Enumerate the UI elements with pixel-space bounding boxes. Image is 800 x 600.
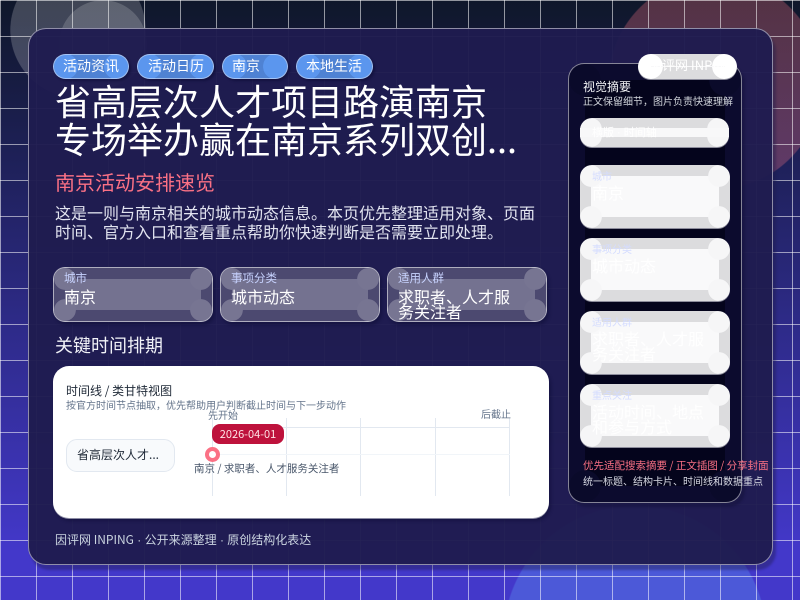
info card: 城市: 南京 xyxy=(64,284,96,308)
sidebar card: 适用人群: 适用人群 xyxy=(592,314,632,329)
brand pill: 因评网 INPING xyxy=(649,55,735,74)
sidebar card: 事项分类 xyxy=(580,238,730,301)
tag: 本地生活 xyxy=(296,54,373,79)
tag: 活动资讯 xyxy=(53,54,129,79)
gantt grid xyxy=(212,418,510,496)
tag: 活动日历 xyxy=(137,54,214,79)
tag: 活动日历: 活动日历 xyxy=(148,56,204,76)
tag: 本地生活: 本地生活 xyxy=(306,56,362,76)
row label pill xyxy=(66,439,175,472)
sidebar card: 适用人群 xyxy=(580,311,730,374)
brand pill xyxy=(638,54,737,79)
sidebar card: 事项分类: 城市动态 xyxy=(592,253,656,277)
start label: 先开始 xyxy=(208,407,238,422)
sidebar description: 正文保留细节，图片负责快速理解 xyxy=(583,93,733,108)
tag: 活动资讯: 活动资讯 xyxy=(63,56,119,76)
end label: 后截止 xyxy=(481,406,511,421)
sidebar card: 事项分类: 事项分类 xyxy=(592,241,632,256)
timeline description: 按官方时间节点抽取，优先帮助用户判断截止时间与下一步动作 xyxy=(66,397,346,412)
footer: 因评网 INPING · 公开来源整理 · 原创结构化表达 xyxy=(55,531,311,548)
tag: 南京 xyxy=(222,54,288,79)
date badge: 2026-04-01 xyxy=(220,426,276,442)
sidebar card: 重点关注: 重点关注 xyxy=(592,387,632,402)
info card: 城市: 城市 xyxy=(64,270,87,286)
timeline panel xyxy=(53,366,549,518)
tag: 南京: 南京 xyxy=(232,56,260,76)
sidebar card: 重点关注 xyxy=(580,384,730,447)
row label pill: 省高层次人才... xyxy=(77,446,159,463)
description text: 时间、官方入口和查看重点帮助你快速判断是否需要立即处理。 xyxy=(55,219,503,243)
info card: 城市 xyxy=(53,267,213,322)
info card: 适用人群: 适用人群 xyxy=(398,270,444,286)
sidebar card: 城市: 南京 xyxy=(592,180,624,204)
sidebar note: 统一标题、结构卡片、时间线和数据重点 xyxy=(583,473,763,488)
sidebar card: 城市: 城市 xyxy=(592,168,612,183)
info card: 事项分类: 城市动态 xyxy=(231,284,295,308)
info card: 适用人群: 求职者、人才服务关注者 xyxy=(398,284,510,323)
info card: 事项分类: 事项分类 xyxy=(231,270,277,286)
title xyxy=(55,74,517,164)
sidebar card: 重点关注: 活动时间、地点和参与方式 xyxy=(592,399,704,438)
description text: 这是一则与南京相关的城市动态信息。本页优先整理适用对象、页面 xyxy=(55,200,535,224)
sidebar highlight line: 优先适配搜索摘要 / 正文插图 / 分享封面 xyxy=(583,458,769,473)
preview strip: 横版 · 时间轴 xyxy=(592,124,657,140)
title: 省高层次人才项目路演南京 xyxy=(55,74,487,126)
sidebar heading: 视觉摘要 xyxy=(583,78,631,95)
info card: 事项分类 xyxy=(220,267,380,322)
timeline marker xyxy=(205,447,220,462)
description text xyxy=(55,200,535,243)
sidebar card: 适用人群: 求职者、人才服务关注者 xyxy=(592,326,704,365)
date badge xyxy=(212,424,284,444)
title: 专场举办赢在南京系列双创... xyxy=(55,112,517,164)
sidebar panel xyxy=(568,63,742,503)
section heading: 关键时间排期 xyxy=(55,332,163,358)
info card: 适用人群 xyxy=(387,267,547,322)
marker caption: 南京 / 求职者、人才服务关注者 xyxy=(194,461,339,476)
timeline heading: 时间线 / 类甘特视图 xyxy=(66,382,172,399)
sidebar card: 城市 xyxy=(580,165,730,228)
preview strip xyxy=(580,118,729,147)
subtitle: 南京活动安排速览 xyxy=(55,167,215,196)
